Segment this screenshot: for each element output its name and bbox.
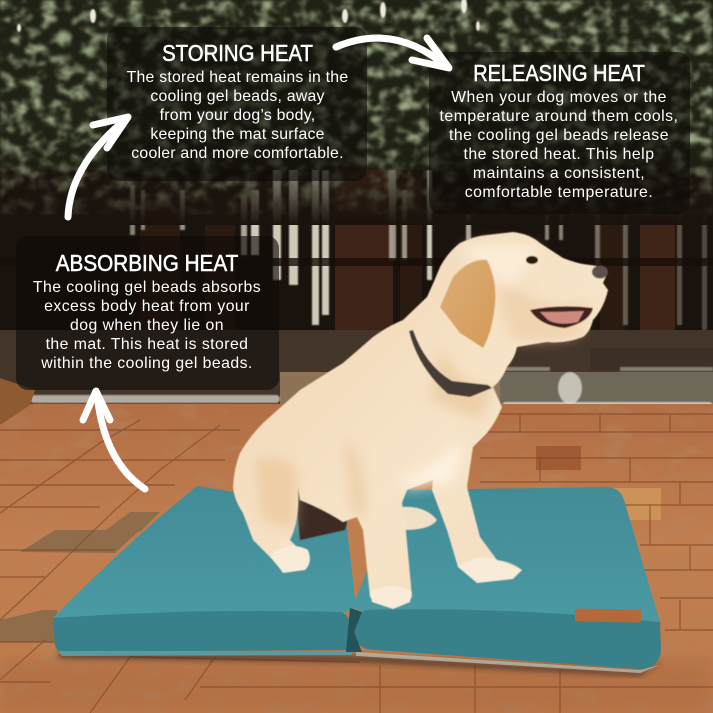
foliage [0, 0, 713, 225]
panel: absorbing heat background [16, 236, 279, 390]
mouth [530, 306, 593, 328]
nose [592, 266, 608, 278]
dog [233, 232, 608, 609]
arrow: absorbing upward [83, 391, 145, 489]
body: storing heat: The stored heat remains in the [127, 69, 348, 86]
far back paw [400, 507, 437, 530]
fur shading [255, 242, 590, 530]
body: storing heat: cooler and more comfortable. [131, 145, 344, 162]
collar [409, 330, 492, 397]
body: storing heat: keeping the mat surface [150, 126, 325, 143]
brick floor [0, 378, 713, 713]
body: releasing heat [440, 89, 678, 201]
body [233, 232, 608, 608]
shadow under belly [295, 490, 350, 540]
body: absorbing heat: dog when they lie on [70, 317, 224, 334]
eye [526, 256, 538, 264]
arrow: absorbing to storing [68, 117, 128, 217]
hind paw [270, 546, 310, 573]
body: absorbing heat [33, 279, 261, 372]
heading: releasing heat: RELEASING HEAT [473, 60, 645, 86]
leather label [575, 608, 641, 623]
cooling mat [53, 486, 664, 676]
patio ground [0, 330, 713, 410]
body: absorbing heat: excess body heat from your [44, 298, 250, 315]
body: releasing heat: the cooling gel beads release [449, 127, 669, 144]
heading: storing heat: STORING HEAT [162, 40, 313, 66]
panel: storing heat background [107, 27, 367, 181]
right panel [352, 487, 660, 622]
body: absorbing heat: The cooling gel beads absorbs [33, 279, 261, 296]
arrow: storing to releasing [336, 38, 449, 68]
body: storing heat [126, 69, 348, 162]
panel: releasing heat background [429, 52, 690, 214]
ear [440, 260, 495, 348]
front paws [458, 557, 522, 583]
left panel [53, 486, 356, 618]
body: absorbing heat: within the cooling gel beads. [41, 355, 253, 372]
heading: absorbing heat: ABSORBING HEAT [56, 250, 238, 276]
body: releasing heat: the stored heat. This help [464, 146, 654, 163]
body: releasing heat: maintains a consistent, [473, 165, 645, 182]
body: absorbing heat: the mat. This heat is stored [46, 336, 248, 353]
body: releasing heat: When your dog moves or the [451, 89, 667, 106]
body: storing heat: cooling gel beads, away [150, 88, 325, 105]
text: releasing heat [440, 60, 678, 201]
text: storing heat [126, 40, 348, 162]
text: absorbing heat [33, 250, 261, 372]
body: releasing heat: comfortable temperature. [465, 184, 653, 201]
body: releasing heat: temperature around them cools, [440, 108, 678, 125]
body: storing heat: from your dog’s body, [160, 107, 315, 124]
fence [0, 150, 713, 350]
